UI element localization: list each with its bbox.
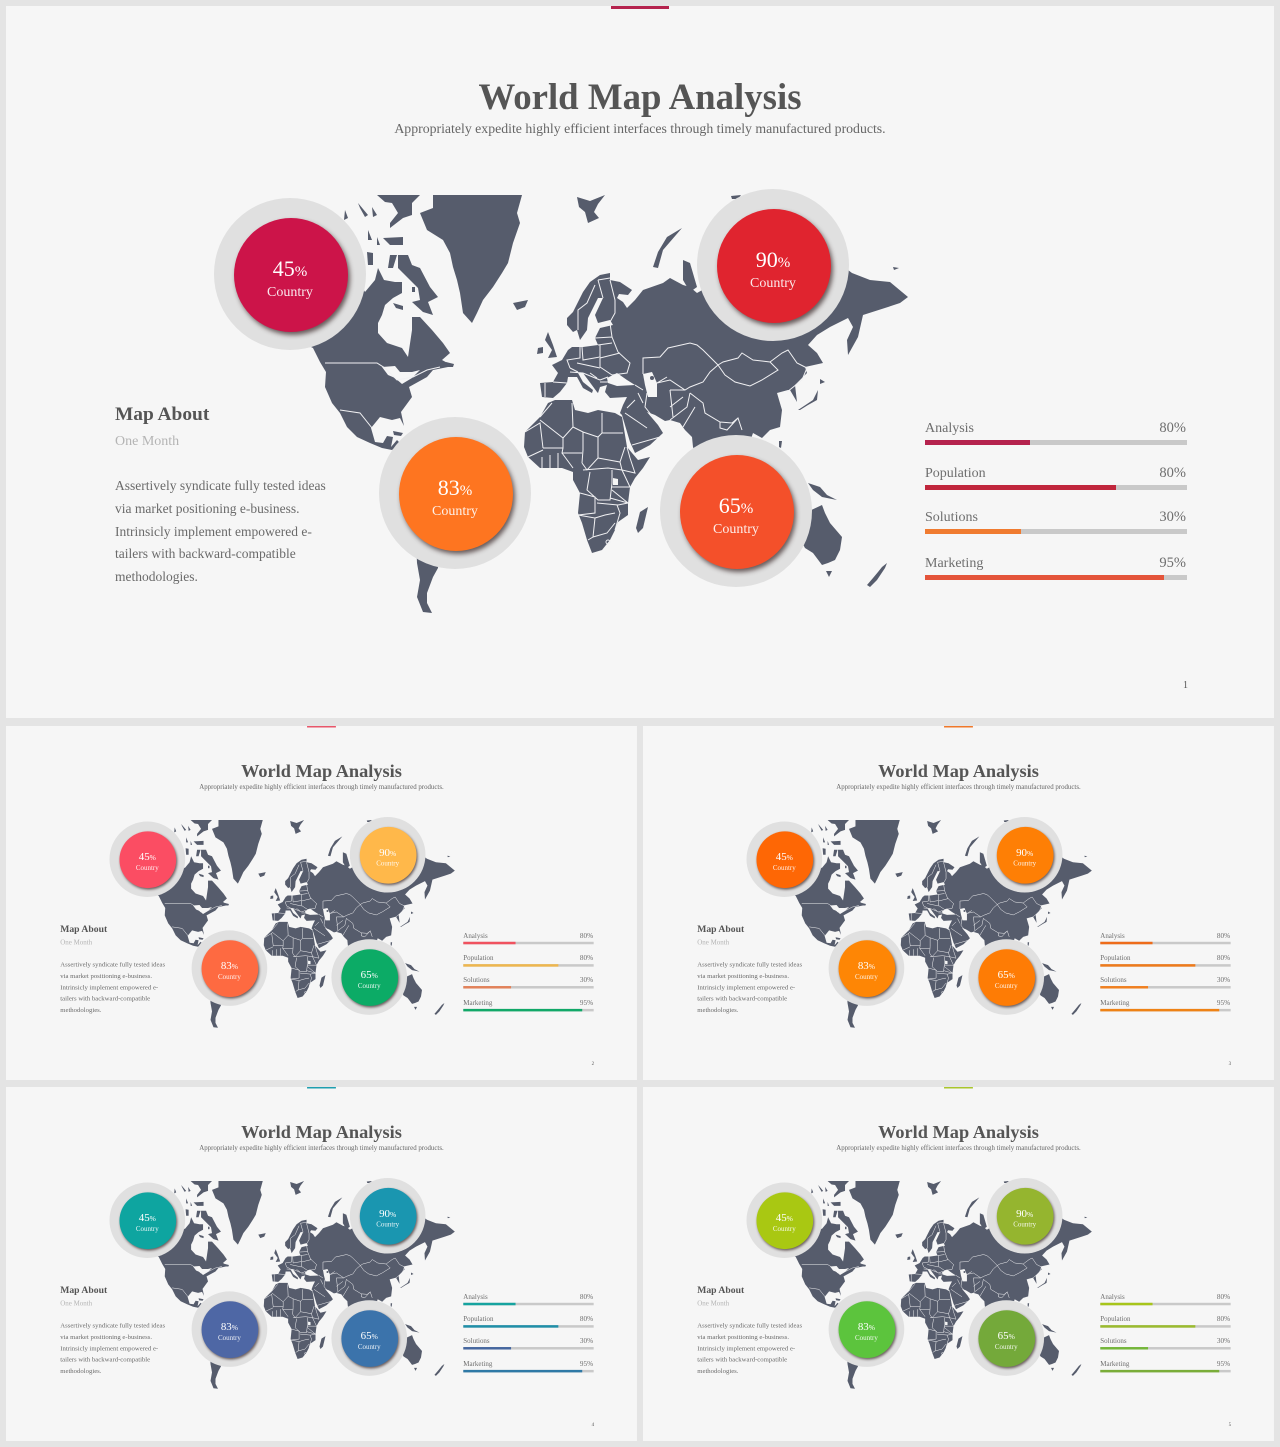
subtitle: Appropriately expedite highly efficient interfaces through timely manufactured products. bbox=[394, 121, 886, 136]
world map bbox=[311, 195, 908, 613]
circle: 45%: Country bbox=[136, 1226, 159, 1233]
bar: marketing bbox=[463, 1360, 594, 1372]
circle: 65%: 65% bbox=[719, 493, 753, 518]
circle: 45%: Country bbox=[773, 865, 796, 872]
circle: 83%: 83% bbox=[858, 959, 875, 972]
circle: 83%: Country bbox=[218, 974, 241, 981]
circle: 90%: Country bbox=[376, 860, 399, 868]
paragraph: via market positioning e-business. bbox=[697, 1333, 789, 1340]
circle: 65%: 65% bbox=[998, 968, 1015, 981]
bar: marketing: 95% bbox=[1217, 999, 1230, 1007]
circle: 83%: Country bbox=[432, 504, 478, 519]
paragraph: Intrinsicly implement empowered e- bbox=[60, 983, 158, 991]
circle: 65%: 65% bbox=[361, 1329, 378, 1342]
slide 5: green panel bbox=[643, 1087, 1274, 1441]
circle: 90% bbox=[987, 1178, 1062, 1254]
subtitle: Appropriately expedite highly efficient interfaces through timely manufactured products. bbox=[199, 783, 444, 791]
paragraph: Assertively syndicate fully tested ideas bbox=[697, 1322, 802, 1329]
heading: map about: Map About bbox=[60, 1285, 107, 1295]
circle: 83% bbox=[192, 930, 267, 1006]
paragraph: tailers with backward-compatible bbox=[115, 546, 296, 561]
circle: 83% bbox=[829, 930, 904, 1006]
circle: 65% bbox=[331, 939, 407, 1015]
bar: solutions: 30% bbox=[1217, 976, 1230, 984]
bar: analysis: Analysis bbox=[925, 421, 974, 436]
heading: map about: Map About bbox=[60, 924, 107, 934]
circle: 83%: 83% bbox=[438, 475, 472, 500]
bar: population bbox=[463, 954, 594, 967]
circle: 45%: 45% bbox=[776, 850, 793, 863]
title: World Map Analysis bbox=[878, 761, 1039, 781]
bar: population: Population bbox=[463, 1316, 493, 1323]
bar: analysis: 80% bbox=[580, 932, 593, 940]
bar: population bbox=[1100, 1315, 1231, 1328]
top accent bar bbox=[307, 1087, 336, 1088]
paragraph: Assertively syndicate fully tested ideas bbox=[60, 1322, 165, 1329]
paragraph bbox=[60, 1322, 165, 1374]
subtitle: Appropriately expedite highly efficient interfaces through timely manufactured products. bbox=[836, 1144, 1081, 1152]
sub-heading: one month: One Month bbox=[60, 1300, 92, 1307]
paragraph: methodologies. bbox=[60, 1367, 101, 1374]
paragraph: tailers with backward-compatible bbox=[697, 1356, 787, 1363]
bar: population: 80% bbox=[580, 954, 593, 962]
bar: solutions bbox=[463, 976, 594, 989]
bar: analysis: 80% bbox=[1217, 932, 1230, 940]
paragraph: tailers with backward-compatible bbox=[60, 995, 150, 1002]
bar: marketing: 95% bbox=[580, 1360, 593, 1368]
bar: population: Population bbox=[1100, 955, 1130, 962]
paragraph: via market positioning e-business. bbox=[60, 972, 152, 979]
circle: 83%: Country bbox=[218, 1335, 241, 1342]
circle: 65%: Country bbox=[358, 1344, 381, 1351]
bar: marketing: Marketing bbox=[463, 999, 492, 1007]
bar: analysis: Analysis bbox=[463, 1293, 488, 1301]
paragraph: Assertively syndicate fully tested ideas bbox=[115, 478, 326, 493]
page number: 5 bbox=[1229, 1422, 1231, 1428]
circle: 45% bbox=[747, 1182, 822, 1258]
slide 3: orange panel bbox=[643, 726, 1274, 1080]
bar: marketing: Marketing bbox=[1100, 999, 1129, 1007]
circle: 90%: Country bbox=[750, 276, 796, 291]
circle: 90%: Country bbox=[1013, 1221, 1036, 1229]
bar: marketing bbox=[925, 555, 1187, 580]
page number: 2 bbox=[592, 1061, 594, 1067]
top accent bar bbox=[944, 726, 973, 727]
title: World Map Analysis bbox=[241, 1122, 402, 1142]
circle: 45% bbox=[110, 821, 185, 897]
bar: analysis: 80% bbox=[1217, 1293, 1230, 1301]
paragraph: Intrinsicly implement empowered e- bbox=[697, 1344, 795, 1352]
circle: 45%: Country bbox=[136, 865, 159, 872]
paragraph: via market positioning e-business. bbox=[60, 1333, 152, 1340]
paragraph: Intrinsicly implement empowered e- bbox=[60, 1344, 158, 1352]
circle: 90% bbox=[350, 1178, 425, 1254]
circle: 65% bbox=[660, 435, 812, 587]
circle: 65%: 65% bbox=[361, 968, 378, 981]
top accent bar bbox=[944, 1087, 973, 1088]
bar: marketing: Marketing bbox=[463, 1360, 492, 1368]
circle: 83%: 83% bbox=[221, 1320, 238, 1333]
bar: population: 80% bbox=[1217, 954, 1230, 962]
circle: 83% bbox=[379, 417, 531, 569]
circle: 90%: 90% bbox=[1016, 1207, 1033, 1219]
circle: 83% bbox=[192, 1291, 267, 1367]
circle: 90%: 90% bbox=[756, 247, 790, 272]
subtitle: Appropriately expedite highly efficient interfaces through timely manufactured products. bbox=[836, 783, 1081, 791]
bar: solutions: Solutions bbox=[463, 1338, 490, 1345]
circle: 90% bbox=[987, 817, 1062, 893]
bar: solutions: 30% bbox=[1217, 1337, 1230, 1345]
circle: 83%: 83% bbox=[221, 959, 238, 972]
bar: population: 80% bbox=[1217, 1315, 1230, 1323]
circle: 83% bbox=[829, 1291, 904, 1367]
circle: 45% bbox=[747, 821, 822, 897]
circle: 90%: Country bbox=[376, 1221, 399, 1229]
circle: 65%: Country bbox=[358, 983, 381, 990]
paragraph: via market positioning e-business. bbox=[115, 501, 299, 516]
paragraph bbox=[60, 961, 165, 1014]
bar: population bbox=[463, 1315, 594, 1328]
circle: 45%: 45% bbox=[273, 256, 307, 281]
world map bbox=[158, 1181, 455, 1389]
sub-heading: one month: One Month bbox=[697, 939, 729, 946]
bar: marketing: 95% bbox=[580, 999, 593, 1007]
heading: map about: Map About bbox=[697, 1285, 744, 1295]
paragraph bbox=[697, 1322, 802, 1374]
circle: 90% bbox=[350, 817, 425, 893]
circle: 45% bbox=[110, 1182, 185, 1258]
bar: analysis bbox=[1100, 932, 1231, 944]
bar: population: Population bbox=[463, 955, 493, 962]
circle: 83%: 83% bbox=[858, 1320, 875, 1333]
circle: 90%: Country bbox=[1013, 860, 1036, 868]
circle: 65%: Country bbox=[995, 1344, 1018, 1351]
paragraph: tailers with backward-compatible bbox=[697, 995, 787, 1002]
circle: 65% bbox=[968, 1300, 1044, 1376]
world map bbox=[158, 820, 455, 1028]
circle: 90%: 90% bbox=[1016, 846, 1033, 858]
paragraph: via market positioning e-business. bbox=[697, 972, 789, 979]
bar: solutions: 30% bbox=[580, 1337, 593, 1345]
bar: solutions bbox=[1100, 1337, 1231, 1350]
bar: analysis: 80% bbox=[1159, 420, 1186, 436]
circle: 90%: 90% bbox=[379, 846, 396, 858]
circle: 65%: Country bbox=[713, 522, 759, 537]
circle: 65%: 65% bbox=[998, 1329, 1015, 1342]
heading: map about: Map About bbox=[697, 924, 744, 934]
bar: population: 80% bbox=[1159, 465, 1186, 481]
slide 1: main panel bbox=[6, 6, 1274, 718]
bar: solutions bbox=[925, 509, 1187, 534]
bar: marketing: 95% bbox=[1217, 1360, 1230, 1368]
circle: 83%: Country bbox=[855, 974, 878, 981]
bar: analysis bbox=[925, 420, 1187, 445]
bar: solutions: 30% bbox=[580, 976, 593, 984]
subtitle: Appropriately expedite highly efficient interfaces through timely manufactured products. bbox=[199, 1144, 444, 1152]
bar: solutions: Solutions bbox=[463, 977, 490, 984]
paragraph bbox=[115, 478, 326, 584]
circle: 45%: 45% bbox=[776, 1211, 793, 1224]
bar: solutions: Solutions bbox=[925, 510, 978, 525]
circle: 45% bbox=[214, 198, 366, 350]
circle: 45%: Country bbox=[773, 1226, 796, 1233]
world map bbox=[795, 820, 1092, 1028]
bar: solutions: 30% bbox=[1159, 509, 1186, 525]
paragraph: Intrinsicly implement empowered e- bbox=[697, 983, 795, 991]
circle: 90%: 90% bbox=[379, 1207, 396, 1219]
bar: analysis bbox=[463, 932, 594, 944]
paragraph: methodologies. bbox=[697, 1367, 738, 1374]
paragraph: methodologies. bbox=[115, 569, 198, 584]
sub-heading: one month: One Month bbox=[60, 939, 92, 946]
sub-heading: one month: One Month bbox=[115, 434, 179, 449]
circle: 90% bbox=[697, 189, 849, 341]
title: World Map Analysis bbox=[878, 1122, 1039, 1142]
paragraph: methodologies. bbox=[60, 1006, 101, 1013]
circle: 65%: Country bbox=[995, 983, 1018, 990]
circle: 45%: 45% bbox=[139, 850, 156, 863]
bar: analysis: Analysis bbox=[1100, 1293, 1125, 1301]
bar: marketing: 95% bbox=[1159, 555, 1186, 571]
bar: marketing: Marketing bbox=[1100, 1360, 1129, 1368]
bar: analysis bbox=[1100, 1293, 1231, 1306]
circle: 45%: 45% bbox=[139, 1211, 156, 1224]
page number: 4 bbox=[592, 1422, 594, 1428]
bar: marketing bbox=[1100, 1360, 1231, 1372]
bar: analysis: Analysis bbox=[1100, 932, 1125, 940]
slide 4: teal and blue panel bbox=[6, 1087, 637, 1441]
bar: solutions: Solutions bbox=[1100, 977, 1127, 984]
title: World Map Analysis bbox=[478, 76, 802, 117]
bar: solutions: Solutions bbox=[1100, 1338, 1127, 1345]
bar: population: Population bbox=[925, 466, 986, 481]
circle: 65% bbox=[331, 1300, 407, 1376]
bar: population: Population bbox=[1100, 1316, 1130, 1323]
slide 2: warm multicolour panel bbox=[6, 726, 637, 1080]
paragraph bbox=[697, 961, 802, 1014]
sub-heading: one month: One Month bbox=[697, 1300, 729, 1307]
paragraph: tailers with backward-compatible bbox=[60, 1356, 150, 1363]
world map bbox=[795, 1181, 1092, 1389]
bar: analysis: 80% bbox=[580, 1293, 593, 1301]
circle: 45%: Country bbox=[267, 285, 313, 300]
circle: 65% bbox=[968, 939, 1044, 1015]
paragraph: methodologies. bbox=[697, 1006, 738, 1013]
bar: population: 80% bbox=[580, 1315, 593, 1323]
bar: marketing bbox=[1100, 999, 1231, 1012]
bar: solutions bbox=[463, 1337, 594, 1350]
bar: marketing: Marketing bbox=[925, 556, 983, 571]
bar: population bbox=[1100, 954, 1231, 967]
heading: map about: Map About bbox=[115, 404, 209, 425]
bar: solutions bbox=[1100, 976, 1231, 989]
top accent bar bbox=[611, 6, 669, 9]
paragraph: Intrinsicly implement empowered e- bbox=[115, 524, 312, 539]
bar: analysis: Analysis bbox=[463, 932, 488, 940]
top accent bar bbox=[307, 726, 336, 727]
paragraph: Assertively syndicate fully tested ideas bbox=[60, 961, 165, 968]
circle: 83%: Country bbox=[855, 1335, 878, 1342]
title: World Map Analysis bbox=[241, 761, 402, 781]
paragraph: Assertively syndicate fully tested ideas bbox=[697, 961, 802, 968]
page number: 1 bbox=[1183, 680, 1188, 691]
page number: 3 bbox=[1229, 1061, 1231, 1067]
bar: analysis bbox=[463, 1293, 594, 1306]
bar: population bbox=[925, 465, 1187, 490]
bar: marketing bbox=[463, 999, 594, 1012]
